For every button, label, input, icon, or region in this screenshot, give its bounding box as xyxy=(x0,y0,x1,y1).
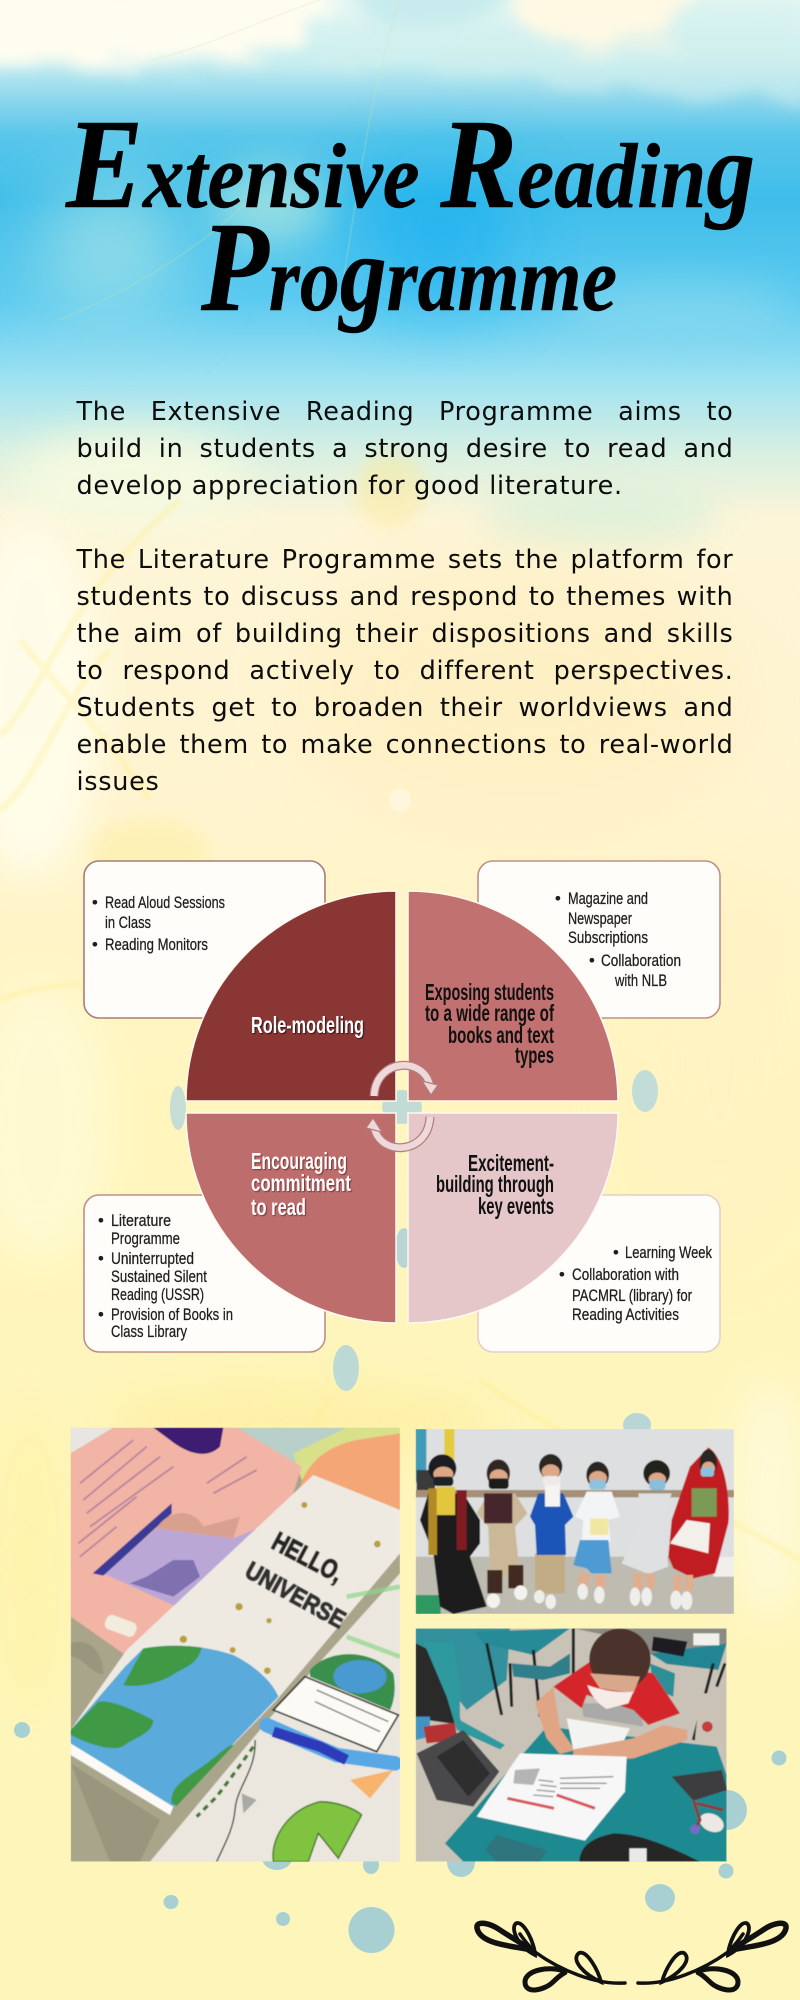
box: role-modeling activities xyxy=(84,861,325,1018)
quadrant: exposing students: types xyxy=(515,1042,554,1068)
kid 5 xyxy=(622,1493,672,1574)
text block: literature programme: The Literature Programme sets the platform for xyxy=(76,545,734,575)
box: commitment activities: Reading (USSR) xyxy=(111,1286,204,1304)
text block: programme aims: build in students a strong desire to read and xyxy=(76,434,734,464)
quadrant: exposing students xyxy=(408,891,618,1101)
box: commitment activities: Provision of Books in xyxy=(111,1306,233,1324)
photo: costume day students xyxy=(416,1429,734,1614)
box: commitment activities: Programme xyxy=(111,1230,180,1248)
text block: literature programme: enable them to make connections to real-world xyxy=(76,730,734,760)
arrow: cycle top xyxy=(374,1065,438,1096)
box: exposure activities: • xyxy=(555,890,561,908)
box: commitment activities: Sustained Silent xyxy=(111,1268,207,1286)
ornament: left branch xyxy=(477,1923,625,1990)
box: commitment activities: Class Library xyxy=(111,1323,188,1341)
box: role-modeling activities: Read Aloud Sessions xyxy=(105,894,225,912)
kid 1 xyxy=(420,1493,487,1614)
kid 2 xyxy=(477,1493,527,1577)
reading strategies diagram xyxy=(84,861,720,1352)
quadrant: exposing students: to a wide range of xyxy=(425,1000,554,1026)
photo: student writing at desk xyxy=(416,1628,727,1862)
quadrant: exposing students: books and text xyxy=(448,1022,554,1048)
text block: programme aims: The Extensive Reading Programme aims to xyxy=(76,397,734,427)
text block: programme aims xyxy=(76,397,734,501)
box: commitment activities: • xyxy=(98,1250,104,1268)
box: exposure activities: Subscriptions xyxy=(568,929,648,947)
text block: literature programme: issues xyxy=(76,767,160,797)
box: exposure activities: with NLB xyxy=(614,972,667,990)
background dots xyxy=(14,788,786,1953)
kid 6 xyxy=(668,1447,729,1578)
quadrant: excitement-building: Excitement- xyxy=(468,1150,554,1176)
box: commitment activities: • xyxy=(98,1212,104,1230)
text block: programme aims: develop appreciation for good literature. xyxy=(76,471,623,501)
text block: literature programme: Students get to broaden their worldviews and xyxy=(76,693,734,723)
box: exposure activities: Collaboration xyxy=(601,952,681,970)
box: exposure activities: Newspaper xyxy=(568,910,632,928)
box: event activities: PACMRL (library) for xyxy=(572,1287,692,1305)
box: event activities: Learning Week xyxy=(625,1244,713,1262)
box: exposure activities xyxy=(478,861,720,1018)
quadrant: encouraging commitment: Encouraging xyxy=(251,1148,347,1174)
kid 3 xyxy=(535,1553,565,1593)
quadrant: encouraging commitment: commitment xyxy=(251,1170,351,1196)
arrow: cycle bottom xyxy=(366,1117,430,1148)
box: event activities: Reading Activities xyxy=(572,1306,679,1324)
ornament: right branch xyxy=(638,1923,786,1990)
box: exposure activities: • xyxy=(589,952,595,970)
photo: student bookmarks: UNIVERSE xyxy=(240,1557,350,1634)
box: role-modeling activities: • xyxy=(92,936,98,954)
quadrant: encouraging commitment xyxy=(186,1113,396,1323)
text block: literature programme xyxy=(76,545,734,797)
kid 4 xyxy=(575,1492,620,1542)
box: commitment activities: Uninterrupted xyxy=(111,1250,194,1268)
quadrant: excitement-building: building through xyxy=(436,1171,554,1197)
text block: literature programme: to respond actively to different perspectives. xyxy=(76,656,734,686)
photo: student bookmarks: HELLO, xyxy=(267,1526,348,1588)
title: Programme xyxy=(200,196,617,338)
quadrant: role-modeling: Role-modeling xyxy=(251,1012,364,1038)
text block: literature programme: the aim of building their dispositions and skills xyxy=(76,619,734,649)
quadrant: role-modeling xyxy=(186,891,396,1101)
title xyxy=(65,93,755,338)
box: commitment activities: Literature xyxy=(111,1212,171,1230)
quadrant: encouraging commitment: to read xyxy=(251,1194,306,1220)
box: commitment activities: • xyxy=(98,1306,104,1324)
box: event activities: Collaboration with xyxy=(572,1266,679,1284)
quadrant: excitement-building: key events xyxy=(478,1193,554,1219)
box: role-modeling activities: Reading Monitors xyxy=(105,936,208,954)
text block: literature programme: students to discuss and respond to themes with xyxy=(76,582,734,612)
quadrant: excitement-building xyxy=(408,1113,618,1323)
quadrant: exposing students: Exposing students xyxy=(425,979,554,1005)
photo: student bookmarks xyxy=(71,1428,400,1862)
box: event activities: • xyxy=(559,1266,565,1284)
title: Extensive Reading xyxy=(65,93,755,235)
box: exposure activities: Magazine and xyxy=(568,890,648,908)
box: event activities xyxy=(478,1195,720,1352)
box: role-modeling activities: • xyxy=(92,894,98,912)
ornament: black laurel branches xyxy=(477,1923,786,1990)
box: commitment activities xyxy=(84,1195,325,1352)
box: event activities: • xyxy=(613,1244,619,1262)
box: role-modeling activities: in Class xyxy=(105,914,151,932)
